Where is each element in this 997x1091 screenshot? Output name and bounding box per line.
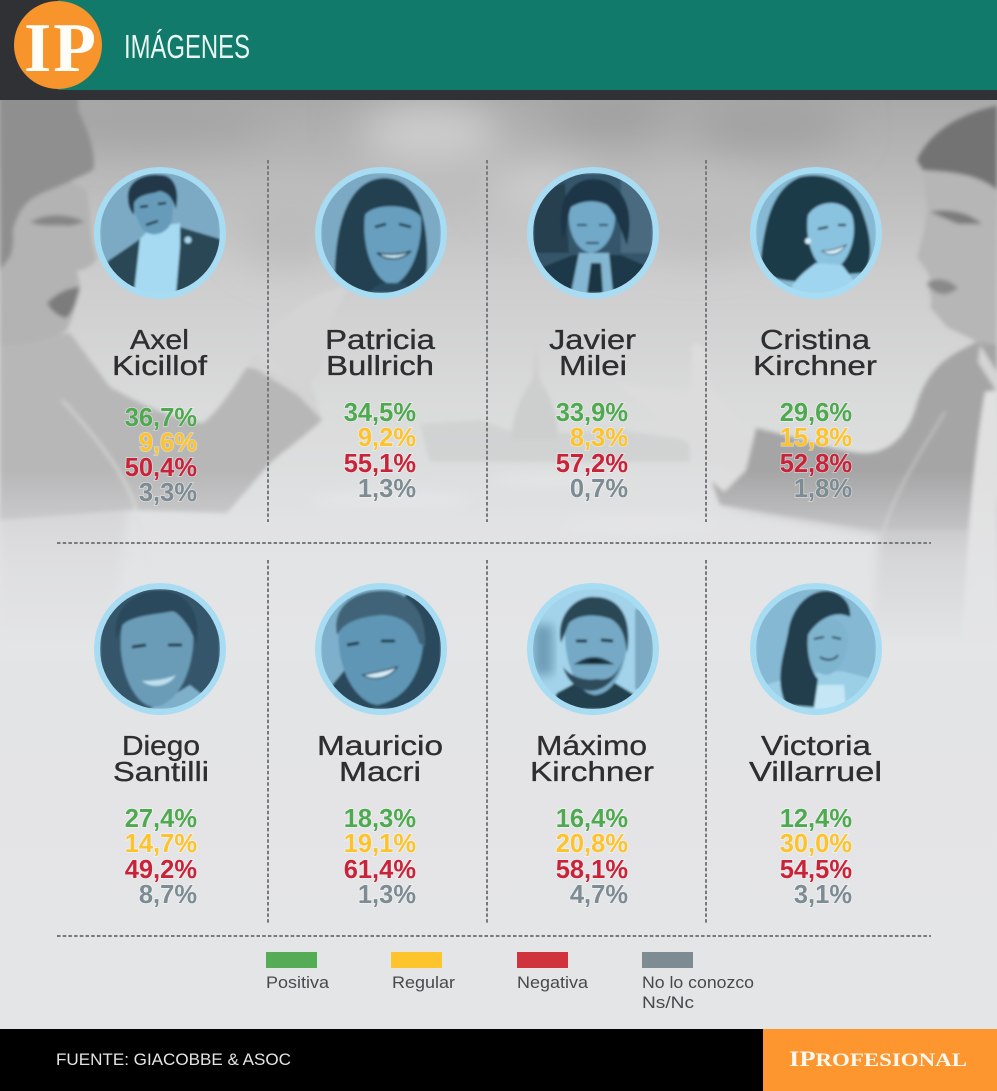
percentages: Cristina Kirchner: 52,8% xyxy=(780,450,852,478)
percentages: Máximo Kirchner: 16,4% xyxy=(556,805,628,833)
percentages: Axel Kicillof: 36,7% xyxy=(125,404,197,432)
footer brand block xyxy=(763,1029,997,1091)
percentages: Victoria Villarruel: 12,4% xyxy=(780,805,852,833)
legend: No lo conozco / Ns/Nc: Ns/Nc xyxy=(642,993,695,1012)
left figure: shouting man xyxy=(0,100,322,538)
legend: Negativa: Negativa xyxy=(517,973,589,992)
portrait: Javier Milei xyxy=(527,167,659,299)
percentages: Cristina Kirchner: 1,8% xyxy=(794,475,852,503)
footer xyxy=(0,1029,997,1091)
percentages: Victoria Villarruel xyxy=(780,805,852,909)
name: Cristina Kirchner: Kirchner xyxy=(753,350,877,381)
legend xyxy=(266,952,754,1012)
percentages: Diego Santilli: 27,4% xyxy=(125,805,197,833)
legend: Negativa xyxy=(517,952,589,992)
name: Mauricio Macri: Mauricio xyxy=(317,730,443,761)
legend: No lo conozco / Ns/Nc xyxy=(642,952,754,1012)
portrait: Máximo Kirchner xyxy=(527,583,659,715)
name: Javier Milei: Javier xyxy=(549,324,636,355)
background: sky and photo collage xyxy=(0,100,997,600)
portrait: Victoria Villarruel xyxy=(750,583,882,715)
percentages: Patricia Bullrich: 55,1% xyxy=(344,450,416,478)
name: Victoria Villarruel: Victoria xyxy=(761,730,872,761)
card: Cristina Kirchner xyxy=(750,167,882,503)
card: Patricia Bullrich xyxy=(315,167,447,503)
card: Mauricio Macri xyxy=(315,583,447,909)
percentages: Patricia Bullrich xyxy=(344,399,416,503)
right figure: speaking man xyxy=(712,104,997,596)
percentages: Javier Milei xyxy=(556,399,628,503)
heading: IMÁGENES xyxy=(124,28,250,65)
name: Mauricio Macri: Macri xyxy=(339,756,421,787)
percentages: Máximo Kirchner xyxy=(556,805,628,909)
dividers xyxy=(57,160,931,936)
name: Patricia Bullrich: Patricia xyxy=(325,324,435,355)
portrait: Diego Santilli xyxy=(94,583,226,715)
name: Javier Milei xyxy=(549,324,636,381)
percentages: Axel Kicillof: 9,6% xyxy=(139,429,197,457)
percentages: Mauricio Macri: 1,3% xyxy=(358,881,416,909)
percentages: Victoria Villarruel: 3,1% xyxy=(794,881,852,909)
percentages: Javier Milei: 57,2% xyxy=(556,450,628,478)
percentages: Máximo Kirchner: 20,8% xyxy=(556,830,628,858)
name: Axel Kicillof: Kicillof xyxy=(112,350,207,381)
percentages: Axel Kicillof: 50,4% xyxy=(125,454,197,482)
percentages: Axel Kicillof: 3,3% xyxy=(139,479,197,507)
name: Diego Santilli: Diego xyxy=(122,730,200,761)
percentages: Victoria Villarruel: 30,0% xyxy=(780,830,852,858)
percentages: Javier Milei: 0,7% xyxy=(570,475,628,503)
percentages: Patricia Bullrich: 34,5% xyxy=(344,399,416,427)
percentages: Mauricio Macri: 19,1% xyxy=(344,830,416,858)
percentages: Axel Kicillof xyxy=(125,404,197,507)
legend: Positiva xyxy=(266,952,330,992)
name: Cristina Kirchner: Cristina xyxy=(760,324,870,355)
percentages: Cristina Kirchner: 29,6% xyxy=(780,399,852,427)
percentages: Diego Santilli: 8,7% xyxy=(139,881,197,909)
name: Patricia Bullrich xyxy=(325,324,435,381)
name: Máximo Kirchner: Kirchner xyxy=(530,756,654,787)
card: Victoria Villarruel xyxy=(749,583,882,909)
percentages: Patricia Bullrich: 9,2% xyxy=(358,424,416,452)
portrait: Axel Kicillof xyxy=(94,167,226,299)
card: Máximo Kirchner xyxy=(527,583,659,909)
percentages: Diego Santilli: 49,2% xyxy=(125,856,197,884)
card: Diego Santilli xyxy=(94,583,226,909)
logo: IP orange circle: IP xyxy=(24,10,96,87)
name: Máximo Kirchner xyxy=(530,730,654,787)
capitol and city silhouette xyxy=(424,376,688,461)
percentages: Máximo Kirchner: 58,1% xyxy=(556,856,628,884)
name: Diego Santilli: Santilli xyxy=(113,756,209,787)
name: Victoria Villarruel xyxy=(749,730,882,787)
percentages: Mauricio Macri: 18,3% xyxy=(344,805,416,833)
portrait: Cristina Kirchner xyxy=(750,167,882,299)
percentages: Diego Santilli: 14,7% xyxy=(125,830,197,858)
name: Cristina Kirchner xyxy=(753,324,877,381)
portrait: Mauricio Macri xyxy=(315,583,447,715)
percentages: Cristina Kirchner: 15,8% xyxy=(780,424,852,452)
legend: Regular: Regular xyxy=(392,973,455,992)
legend: No lo conozco / Ns/Nc: No lo conozco xyxy=(642,973,754,992)
percentages: Victoria Villarruel: 54,5% xyxy=(780,856,852,884)
legend: Regular xyxy=(391,952,455,992)
percentages: Javier Milei: 8,3% xyxy=(570,424,628,452)
footer brand block: IPROFESIONAL xyxy=(789,1046,967,1071)
legend: Positiva: Positiva xyxy=(266,973,330,992)
source text: FUENTE: GIACOBBE & ASOC xyxy=(56,1050,291,1069)
percentages: Mauricio Macri xyxy=(344,805,416,909)
percentages: Máximo Kirchner: 4,7% xyxy=(570,881,628,909)
name: Axel Kicillof: Axel xyxy=(130,324,189,355)
percentages: Patricia Bullrich: 1,3% xyxy=(358,475,416,503)
name: Axel Kicillof xyxy=(112,324,207,381)
name: Diego Santilli xyxy=(113,730,209,787)
name: Javier Milei: Milei xyxy=(559,350,627,381)
percentages: Diego Santilli xyxy=(125,805,197,909)
name: Mauricio Macri xyxy=(317,730,443,787)
percentages: Mauricio Macri: 61,4% xyxy=(344,856,416,884)
name: Patricia Bullrich: Bullrich xyxy=(326,350,434,381)
name: Máximo Kirchner: Máximo xyxy=(536,730,647,761)
percentages: Cristina Kirchner xyxy=(780,399,852,503)
portrait: Patricia Bullrich xyxy=(315,167,447,299)
card: Axel Kicillof xyxy=(94,167,226,507)
percentages: Javier Milei: 33,9% xyxy=(556,399,628,427)
header bar xyxy=(0,0,997,100)
card: Javier Milei xyxy=(527,167,659,503)
name: Victoria Villarruel: Villarruel xyxy=(749,756,882,787)
